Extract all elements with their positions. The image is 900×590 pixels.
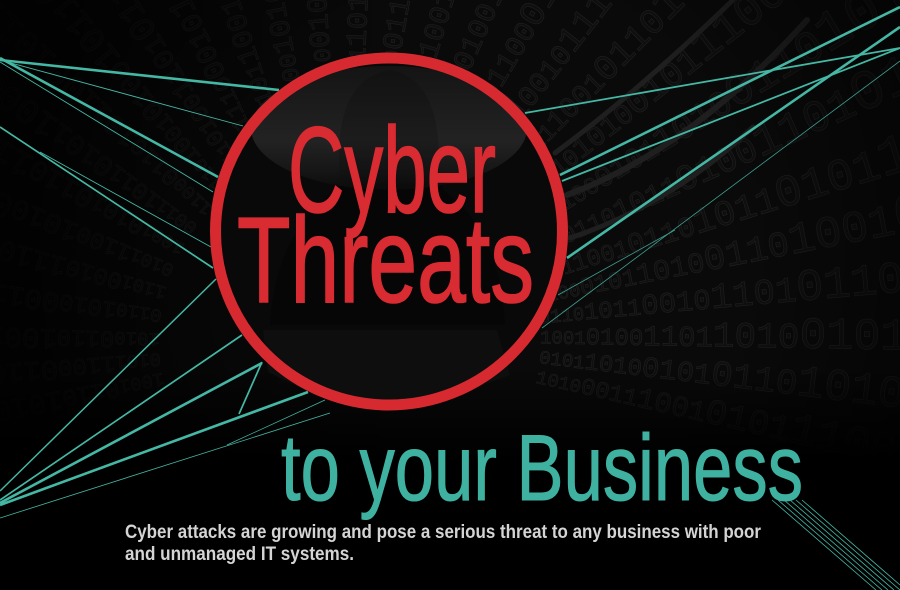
intro paragraph: and unmanaged IT systems. [125, 544, 354, 565]
hooded head over highlight [339, 70, 439, 190]
badge: red ring circle [216, 58, 562, 405]
laptop silhouette [263, 330, 510, 400]
title: Cyber Threats: Threats [237, 192, 534, 328]
teal lines: lower left fan [0, 279, 330, 518]
intro paragraph [125, 522, 762, 565]
title: Cyber Threats: Cyber [288, 102, 496, 238]
glass highlight [251, 66, 527, 190]
teal hatch lines: bottom right [772, 500, 900, 590]
background: cables top right [555, 0, 807, 238]
teal lines: upper right fan [525, 7, 900, 328]
hacker silhouette [270, 72, 505, 325]
ring stroke [216, 58, 562, 405]
teal lines: upper left fan [0, 58, 279, 268]
intro paragraph: Cyber attacks are growing and pose a serious threat to any business with poor [125, 522, 762, 543]
title: Cyber Threats [237, 102, 534, 328]
